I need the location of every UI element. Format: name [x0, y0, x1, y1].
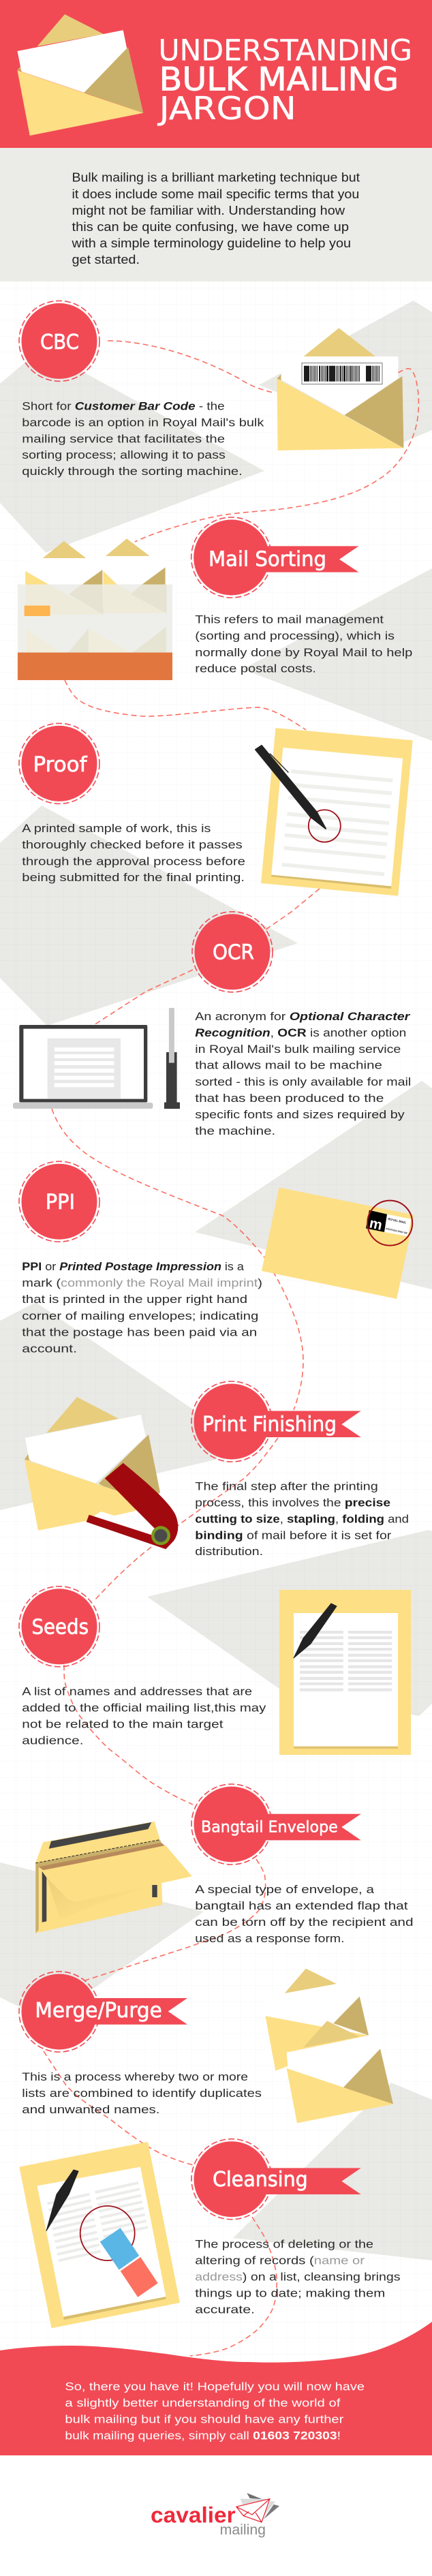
Cleansing description: address ) on a list, cleansing brings — [195, 2270, 401, 2283]
section: Print Finishing — [25, 1381, 409, 1558]
title: BULK MAILING — [159, 61, 399, 99]
badge: Merge/Purge — [19, 1972, 187, 2052]
Cleansing description: things up to date; making them — [195, 2286, 385, 2299]
closing message — [65, 2380, 365, 2442]
Mail Sorting description: (sorting and processing), which is — [195, 630, 395, 643]
OCR description — [195, 1010, 411, 1137]
logo: cavalier mailing — [151, 2493, 279, 2538]
OCR description: Recognition , OCR is another option — [195, 1026, 406, 1039]
Print Finishing description: distribution. — [195, 1545, 263, 1558]
section: OCR — [13, 912, 411, 1137]
Mail Sorting description: reduce postal costs. — [195, 662, 316, 675]
OCR description: sorted - this is only available for mail — [195, 1075, 411, 1088]
badge: PPI: PPI — [46, 1191, 75, 1214]
badge: OCR — [192, 912, 273, 992]
badge: Bangtail Envelope — [191, 1784, 361, 1865]
title — [157, 33, 412, 127]
Proof description: thoroughly checked before it passes — [22, 838, 243, 851]
Proof description: A printed sample of work, this is — [22, 822, 211, 835]
CBC description: quickly through the sorting machine. — [22, 465, 243, 478]
section: Cleansing — [19, 2139, 401, 2328]
section: Bangtail Envelope — [35, 1784, 414, 1945]
Merge/Purge description: and unwanted names. — [22, 2103, 159, 2116]
section: Seeds — [19, 1586, 411, 1755]
Print Finishing description: cutting to size , stapling , folding and — [195, 1513, 409, 1526]
badge: CBC — [19, 301, 99, 381]
Print Finishing description: The final step after the printing — [195, 1479, 378, 1492]
Cleansing description: accurate. — [195, 2303, 255, 2316]
Mail Sorting description — [195, 613, 412, 675]
badge: Cleansing: Cleansing — [213, 2168, 308, 2192]
badge: Seeds: Seeds — [31, 1615, 89, 1640]
icon: envelope with postage impression: POSTAGE PAID GB — [386, 1227, 408, 1235]
title: UNDERSTANDING — [158, 33, 412, 67]
closing message: bulk mailing but if you should have any further — [65, 2412, 344, 2425]
Bangtail description: bangtail has an extended flap that — [195, 1899, 408, 1912]
dashed connector path — [44, 341, 418, 2356]
Mail Sorting description: normally done by Royal Mail to help — [195, 646, 412, 659]
PPI description: PPI or Printed Postage Impression is a — [22, 1260, 244, 1273]
CBC description: mailing service that facilitates the — [22, 432, 225, 445]
Proof description: through the approval process before — [22, 855, 245, 868]
OCR description: specific fonts and sizes required by — [195, 1108, 405, 1121]
badge: Proof: Proof — [33, 753, 88, 777]
Print Finishing description: process, this involves the precise — [195, 1497, 390, 1509]
footer banner — [0, 2322, 432, 2455]
OCR description: that allows mail to be machine — [195, 1059, 382, 1072]
Merge/Purge description: This is a process whereby two or more — [22, 2070, 248, 2083]
intro text: this can be quite confusing, we have come up — [72, 220, 349, 234]
Seeds description — [22, 1685, 266, 1747]
badge: PPI — [19, 1161, 99, 1242]
section: Mail Sorting — [18, 517, 412, 680]
icon: envelope with stapler — [25, 1397, 178, 1549]
Mail Sorting description: This refers to mail management — [195, 613, 384, 626]
PPI description: corner of mailing envelopes; indicating — [22, 1309, 258, 1322]
badge: Print Finishing: Print Finishing — [202, 1413, 337, 1437]
PPI description: that the postage has been paid via an — [22, 1325, 257, 1338]
Proof description — [22, 822, 245, 884]
section: CBC — [19, 301, 403, 478]
Merge/Purge description — [22, 2070, 262, 2116]
intro text: Bulk mailing is a brilliant marketing technique but — [72, 171, 360, 185]
icon: list document with pen — [279, 1590, 411, 1755]
Proof description: being submitted for the final printing. — [22, 871, 245, 884]
closing message: a slightly better understanding of the world of — [65, 2396, 341, 2409]
Cleansing description — [195, 2238, 401, 2316]
intro text: it does include some mail specific terms that you — [72, 187, 359, 201]
Seeds description: A list of names and addresses that are — [22, 1685, 252, 1698]
OCR description: in Royal Mail's bulk mailing service — [195, 1043, 401, 1056]
Cleansing description: altering of records ( name or — [195, 2254, 365, 2267]
icon: laptop — [13, 1025, 153, 1109]
logo: cavalier mailing: mailing — [220, 2522, 266, 2538]
Merge/Purge description: lists are combined to identify duplicates — [22, 2087, 262, 2100]
icon: bangtail envelope — [35, 1822, 191, 1933]
badge: OCR: OCR — [213, 940, 254, 965]
title: JARGON — [157, 90, 296, 127]
intro text: with a simple terminology guideline to help you — [71, 236, 351, 250]
badge: Seeds — [19, 1586, 99, 1667]
CBC description: barcode is an option in Royal Mail's bulk — [22, 416, 264, 429]
OCR description: An acronym for Optional Character — [195, 1010, 411, 1023]
Seeds description: not be related to the main target — [22, 1718, 223, 1731]
PPI description: account. — [22, 1342, 77, 1355]
icon: envelope with postage impression — [262, 1187, 414, 1299]
PPI description — [22, 1260, 262, 1355]
Bangtail description: A special type of envelope, a — [195, 1883, 375, 1896]
icon: envelope with barcode — [277, 328, 403, 450]
intro panel — [0, 148, 432, 281]
icon: mail tray — [18, 538, 172, 680]
Bangtail description: used as a response form. — [195, 1932, 345, 1945]
PPI description: that is printed in the upper right hand — [22, 1293, 247, 1306]
section: PPI — [19, 1161, 414, 1355]
badge: Cleansing — [191, 2139, 361, 2220]
icon: envelope with postage impression: ROYAL MAIL — [388, 1217, 407, 1225]
badge: Print Finishing — [191, 1381, 361, 1462]
CBC description — [22, 399, 264, 478]
intro text — [71, 171, 360, 266]
CBC description: sorting process; allowing it to pass — [22, 448, 226, 461]
icon: stand — [164, 1008, 180, 1109]
PPI description: mark ( commonly the Royal Mail imprint ) — [22, 1276, 262, 1289]
closing message: bulk mailing queries, simply call 01603 720303 ! — [65, 2429, 341, 2442]
Seeds description: audience. — [22, 1734, 83, 1747]
badge: Merge/Purge: Merge/Purge — [35, 1999, 162, 2023]
badge: Mail Sorting — [191, 517, 358, 598]
Bangtail description — [195, 1883, 414, 1945]
badge: CBC: CBC — [40, 331, 79, 354]
Bangtail description: can be torn off by the recipient and — [195, 1916, 414, 1929]
Seeds description: added to the official mailing list,this may — [22, 1701, 266, 1714]
logo: cavalier mailing: cavalier — [151, 2503, 236, 2528]
section: Merge/Purge — [19, 1969, 393, 2123]
badge: Proof — [19, 723, 99, 803]
Print Finishing description: binding of mail before it is set for — [195, 1529, 392, 1542]
header banner — [0, 0, 432, 148]
intro text: get started. — [72, 253, 140, 266]
icon: proof document with pen — [256, 728, 413, 896]
CBC description: Short for Customer Bar Code - the — [22, 399, 225, 412]
OCR description: the machine. — [195, 1124, 275, 1137]
OCR description: that has been produced to the — [195, 1092, 384, 1105]
intro text: might not be familiar with. Understanding how — [72, 204, 345, 217]
section: Proof — [19, 723, 413, 896]
icon: document with eraser — [19, 2142, 180, 2328]
badge: Bangtail Envelope: Bangtail Envelope — [201, 1819, 338, 1837]
Print Finishing description — [195, 1479, 409, 1558]
badge: Mail Sorting: Mail Sorting — [209, 548, 326, 572]
icon: envelope with postage impression: m — [368, 1215, 384, 1233]
Cleansing description: The process of deleting or the — [195, 2238, 373, 2251]
closing message: So, there you have it! Hopefully you will now have — [65, 2380, 365, 2393]
icon: two envelopes merging — [265, 1969, 393, 2123]
icon: open envelope with letter — [18, 14, 143, 136]
